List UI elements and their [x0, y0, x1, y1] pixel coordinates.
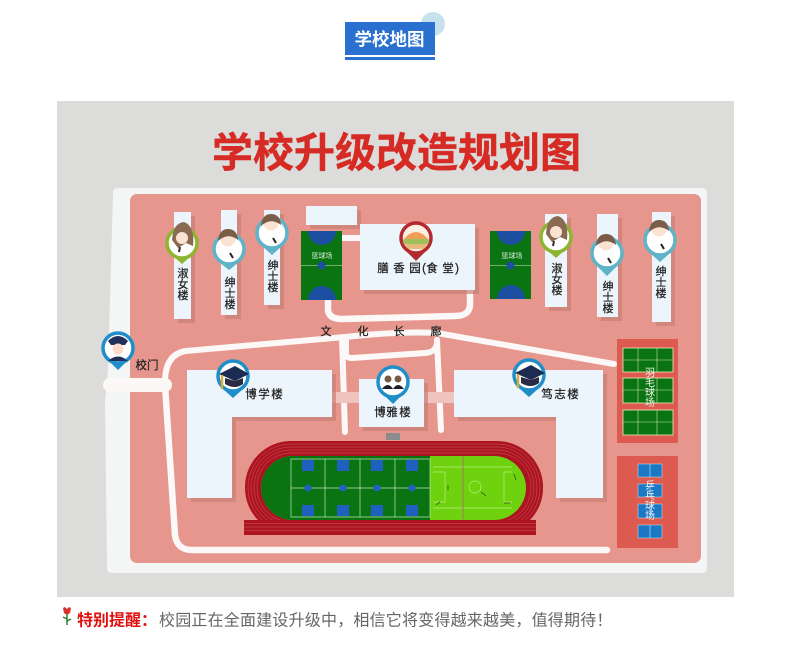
header badge: 学校地图	[345, 12, 445, 60]
basketball court right: 篮球场	[502, 251, 522, 260]
map labels: 淑	[552, 262, 562, 275]
pin: 绅士楼 right 2	[645, 220, 675, 262]
canteen building	[360, 224, 475, 290]
map labels: 笃	[541, 387, 553, 401]
map labels: 学	[258, 387, 270, 401]
map labels: 楼	[602, 301, 614, 315]
map labels	[136, 259, 666, 419]
map labels: 绅	[656, 265, 666, 278]
football pitch lines	[433, 459, 512, 518]
badminton area: 羽	[645, 367, 655, 379]
map labels: 堂	[442, 262, 454, 275]
map labels: 士	[224, 287, 236, 300]
pin: 博雅楼	[378, 367, 408, 404]
footer reminder: 校园正在全面建设升级中，相信它将变得越来越美，值得期待！	[159, 612, 613, 630]
pin: 博学楼 cap	[218, 361, 249, 398]
map labels: 绅	[268, 259, 278, 272]
map labels: 园	[409, 262, 421, 275]
map labels: 廊	[430, 324, 442, 338]
map labels: 楼	[271, 387, 283, 401]
map labels: 士	[656, 276, 666, 289]
building shadows	[178, 210, 675, 502]
map labels: 文	[320, 324, 332, 338]
panel: school map	[57, 101, 734, 597]
map labels: 士	[268, 270, 278, 283]
map labels: 校门	[136, 358, 158, 372]
map labels: )	[455, 263, 459, 275]
pin: 绅士楼 right 1	[592, 234, 622, 276]
badminton area: 场	[645, 396, 655, 409]
building: 笃志楼	[454, 370, 603, 498]
table tennis area: 乓	[645, 489, 655, 502]
building: 博学楼	[187, 370, 332, 498]
table tennis area: 乒	[645, 479, 655, 492]
roads	[110, 238, 614, 550]
header badge: 学校地图: 学校地图	[354, 30, 424, 50]
map labels: 绅	[224, 276, 236, 289]
track straight	[244, 520, 536, 535]
map labels: 楼	[552, 283, 562, 297]
map labels: 楼	[224, 297, 236, 311]
map labels: 绅	[602, 280, 614, 293]
map labels: 食	[426, 261, 438, 275]
map labels: (	[422, 263, 426, 275]
map labels: 楼	[656, 286, 666, 300]
map title: 学校升级改造规划图	[212, 130, 581, 176]
scoreboard	[386, 433, 400, 440]
pin: canteen	[401, 223, 431, 261]
map labels: 博	[374, 406, 386, 419]
campus grounds	[130, 194, 701, 563]
map labels: 化	[358, 324, 368, 338]
campus base plate	[105, 188, 707, 573]
map labels: 楼	[178, 288, 188, 302]
map labels: 楼	[399, 405, 411, 419]
map labels: 博	[245, 388, 257, 401]
map labels: 女	[178, 277, 188, 291]
basketball court right	[490, 231, 531, 299]
running track and sports field	[244, 433, 543, 535]
map labels: 香	[393, 262, 405, 275]
table tennis area	[617, 456, 678, 548]
table tennis area: 场	[645, 509, 655, 522]
map labels: 士	[602, 291, 614, 304]
badminton area: 球	[645, 386, 655, 399]
small top building	[306, 206, 357, 225]
building: 博雅楼	[359, 379, 424, 427]
basketball court left	[301, 231, 342, 300]
icon: rose	[63, 607, 71, 625]
map labels: 楼	[268, 280, 278, 294]
map labels: 长	[394, 325, 404, 338]
footer reminder: 特别提醒：	[77, 610, 157, 630]
badminton area: 毛	[645, 377, 655, 389]
map labels: 楼	[567, 387, 579, 401]
map labels: 雅	[386, 405, 398, 419]
pin: 绅士楼 left 2	[257, 214, 287, 255]
basketball court left: 篮球场	[312, 251, 332, 260]
covered walkways	[332, 392, 454, 403]
basketball courts on field	[291, 459, 430, 517]
dormitory buildings	[174, 210, 671, 322]
pin: school gate guard	[103, 333, 133, 370]
badminton area	[617, 339, 678, 443]
map labels: 膳	[377, 261, 389, 275]
pin: 绅士楼 left 1	[214, 229, 244, 270]
map labels: 志	[554, 388, 566, 401]
pin: 淑女楼 left	[167, 222, 197, 264]
map labels: 淑	[178, 267, 188, 280]
map labels: 女	[552, 272, 562, 286]
pin: 淑女楼 right	[541, 216, 571, 258]
table tennis area: 球	[645, 499, 655, 512]
pin: 笃志楼 cap	[514, 360, 545, 397]
